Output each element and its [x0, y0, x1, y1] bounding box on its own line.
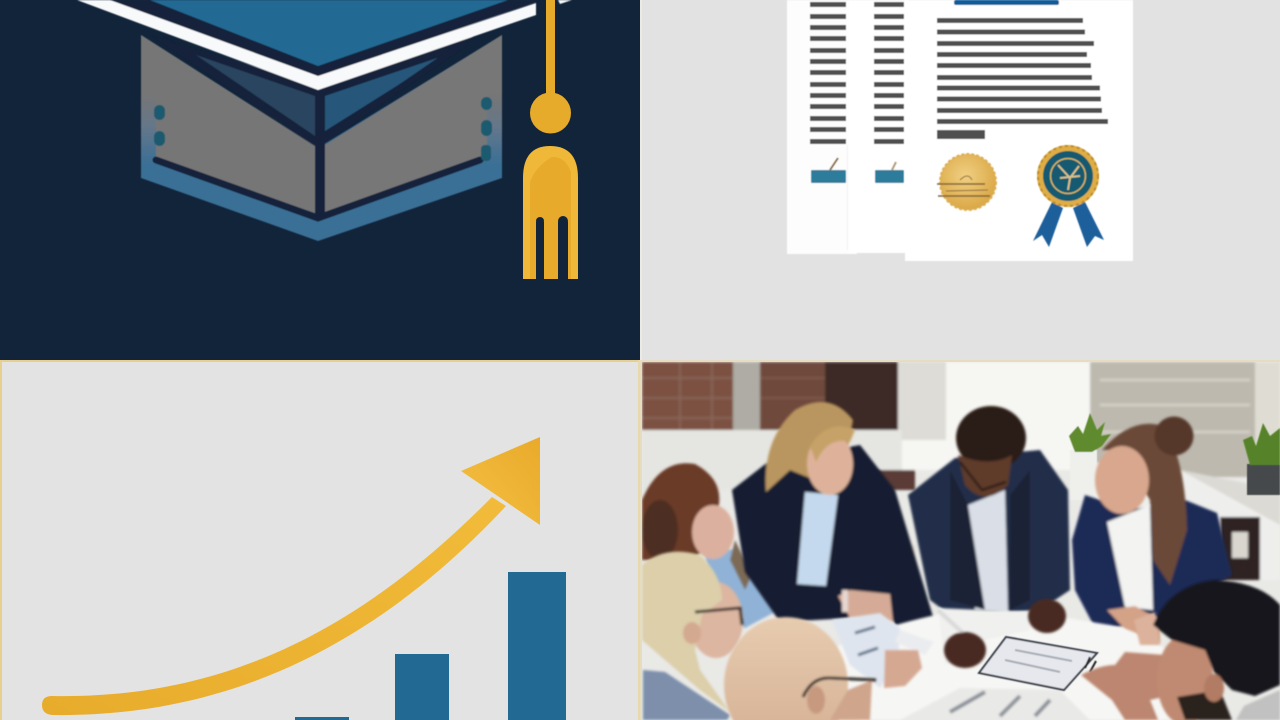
person: red-haired woman: [642, 463, 775, 628]
icon: cap side studs: [154, 97, 492, 161]
clipboard document: [979, 637, 1097, 690]
icon: gold tassel: [523, 0, 578, 279]
icon: mortarboard cap: [77, 0, 572, 241]
person: dark-haired bearded man, foreground right: [1081, 580, 1280, 720]
table with papers: [830, 608, 1200, 720]
back certificate sheets: [787, 0, 908, 254]
person: bald man with glasses, foreground: [724, 617, 876, 720]
person: man in navy suit with glasses: [908, 406, 1070, 615]
icon: blue ribbon rosette: [1033, 145, 1104, 247]
person: smiling woman with hair bun: [1072, 416, 1232, 643]
crumpled paper and hands: [832, 599, 1066, 688]
person: blonde woman in dark suit: [732, 402, 940, 640]
panel: growth chart: [0, 360, 640, 720]
background: room walls: [642, 362, 1280, 582]
front certificate sheet: [905, 0, 1133, 261]
person: blonde woman with glasses, foreground left: [642, 552, 743, 720]
plants on the sill: [1069, 413, 1280, 500]
photo top frame line: [640, 360, 1280, 362]
icon: gold seal with signature: [937, 154, 996, 210]
panel: graduation cap: [0, 0, 640, 360]
panel: certificates: [640, 0, 1280, 360]
panel: team meeting photo: [640, 360, 1280, 720]
arrow: rising growth curve: [42, 437, 540, 715]
bar chart: [295, 572, 566, 720]
